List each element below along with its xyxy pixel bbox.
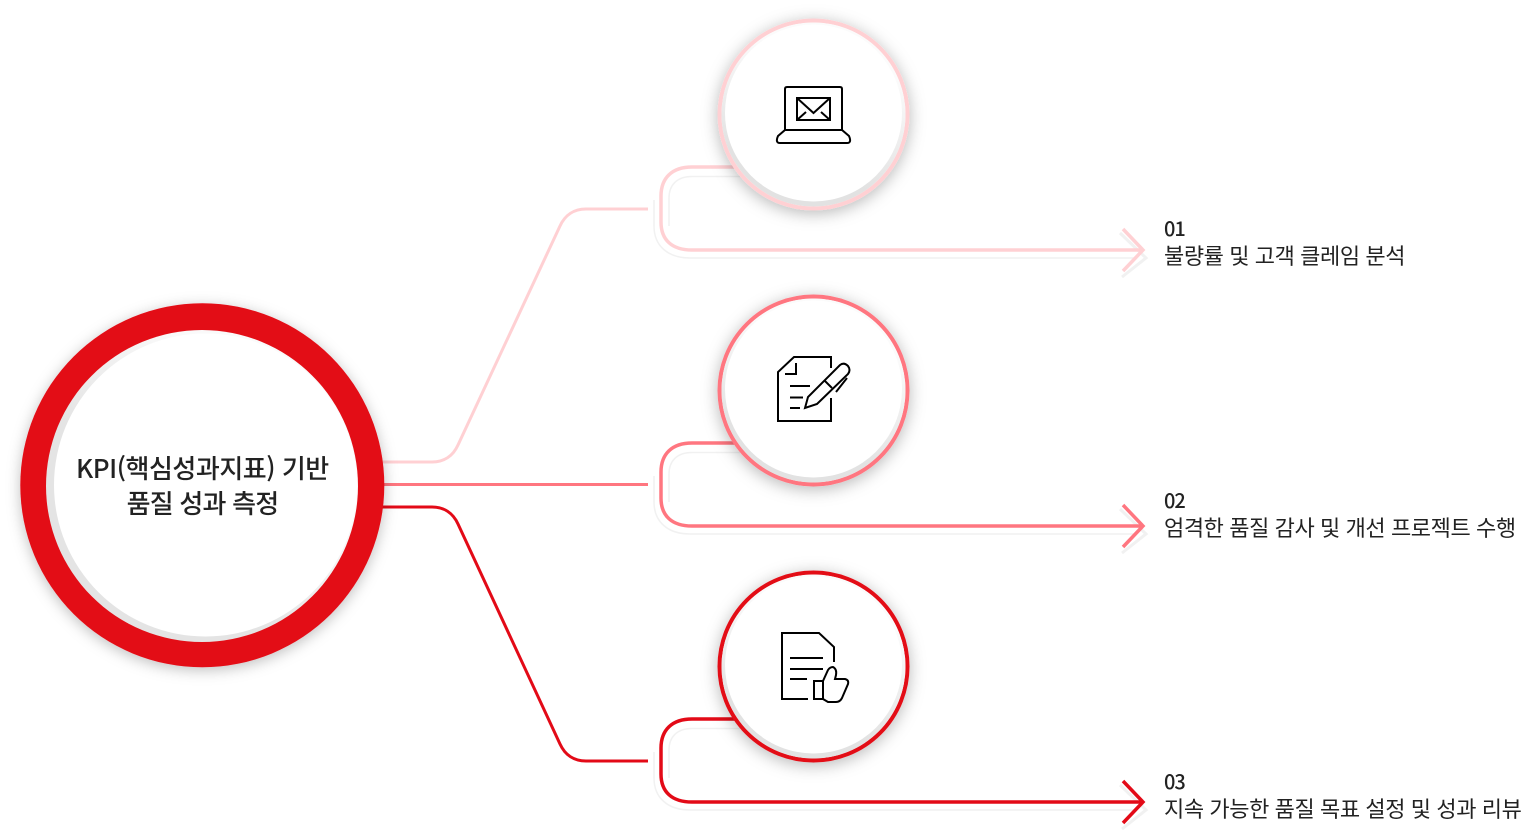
item 03: label: 03	[1164, 766, 1185, 795]
hub title: 품질 성과 측정	[127, 484, 278, 521]
connector: hub to item 03	[380, 507, 648, 761]
item 01: label: 01	[1164, 213, 1185, 242]
connector: hub to item 01	[380, 209, 648, 462]
item 01: label: 불량률 및 고객 클레임 분석	[1164, 244, 1405, 269]
item 02: icon circle	[720, 296, 908, 484]
item 02: label: 엄격한 품질 감사 및 개선 프로젝트 수행	[1164, 516, 1516, 541]
item 03: label: 지속 가능한 품질 목표 설정 및 성과 리뷰	[1164, 797, 1522, 822]
icon: document with pen	[778, 357, 850, 421]
item 03: icon circle	[720, 572, 908, 760]
item 02: label: 02	[1164, 485, 1185, 514]
central hub circle	[20, 303, 384, 667]
item 01: label	[1164, 213, 1405, 269]
item 03: bracket arrow	[654, 719, 1146, 829]
item 02: bracket arrow	[654, 443, 1146, 553]
item 01: bracket arrow	[654, 167, 1146, 277]
item 01: icon circle	[720, 20, 908, 208]
item 02: label	[1164, 485, 1516, 541]
icon: document with thumbs up	[782, 633, 848, 702]
connector: hub to item 02	[380, 483, 648, 486]
hub title: KPI(핵심성과지표) 기반	[76, 449, 329, 486]
hub title	[76, 449, 329, 521]
icon: laptop with envelope	[777, 87, 850, 143]
item 03: label	[1164, 766, 1522, 822]
